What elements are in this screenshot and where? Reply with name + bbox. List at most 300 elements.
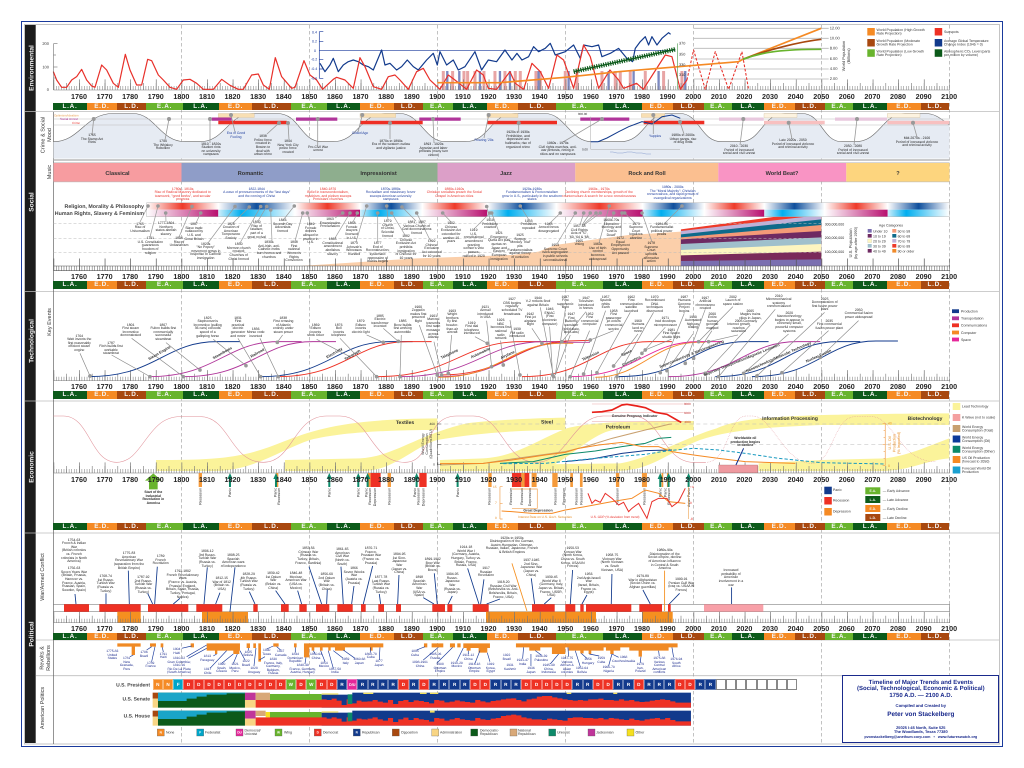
legend: age categories	[868, 224, 915, 253]
label: liberation theology: "God is	[606, 229, 617, 233]
label: repeal: 1933	[525, 218, 532, 222]
us population age bands	[300, 211, 821, 266]
year scale: 2080	[890, 382, 906, 391]
conflict: soviet disintegration: 1980s-90s	[657, 548, 673, 552]
event: jet: First jet	[525, 315, 536, 319]
president row: D	[637, 682, 640, 687]
revolt: chile: Chile	[204, 670, 211, 674]
label: violence 2020s: and criminal activity	[778, 145, 808, 149]
legend: technology: Computer	[961, 331, 977, 335]
president row: W	[309, 682, 313, 687]
year scale: 2020	[736, 92, 752, 101]
event: moon: 1969	[634, 318, 642, 322]
conflict: war of 1812	[213, 577, 231, 592]
marker captions	[198, 488, 691, 507]
label: exclusion 1882: Chinese	[400, 238, 412, 242]
revolt: korea egypt: 1919	[487, 662, 494, 666]
president row: D	[596, 682, 600, 687]
phase bar: L.D.	[124, 281, 139, 288]
year scale: 2010	[711, 382, 727, 391]
event: nanotechnology	[775, 312, 804, 333]
label: unrest 2010: 2010 - 2030	[730, 144, 748, 148]
conflict: vietnam: Vietnam, USA)	[601, 568, 623, 572]
year scale: 1820	[225, 92, 241, 101]
label: civil rights: cities and on campuses	[540, 152, 575, 156]
label: affirmative action: action	[647, 259, 656, 263]
legend: parties: Unionist	[557, 730, 570, 734]
legend: economic lines: Consumption (Total)	[962, 429, 993, 433]
label: emancipation	[320, 218, 340, 229]
caption: social gospel: Christian socialists preach the Social	[427, 190, 482, 194]
phase bar: E.A.	[430, 391, 445, 398]
label: birth control: control	[593, 249, 603, 253]
conflict: franco prussian: Prussian War	[361, 553, 381, 557]
social dots	[148, 206, 682, 213]
label: slave trade: Slave trade	[185, 226, 203, 230]
label: civil rights	[538, 141, 577, 156]
year scale: 2100	[941, 624, 957, 633]
year scale: 1960	[583, 624, 599, 633]
revolt: italy: Italy	[343, 660, 349, 664]
conflict: russo turkish 2: (Russia vs.	[135, 586, 152, 590]
event: nanotechnology: Nanotechnology	[777, 314, 802, 318]
event: passenger jet: commercial	[605, 323, 622, 327]
event: stephenson: 1825	[204, 316, 211, 320]
label: exclusion 1902: another 10	[443, 236, 459, 240]
world population gridlines and axis: 2.00	[830, 76, 838, 81]
conflict: wwi: Britain, France,	[454, 560, 478, 564]
legend: age categories: 50 to 59	[898, 229, 910, 233]
event: jet	[524, 312, 536, 327]
president row: D	[688, 682, 692, 687]
phase bar: L.D.	[529, 103, 544, 110]
president row: D	[218, 682, 221, 687]
label: womens vote: granting	[468, 243, 480, 247]
axis labels: 200	[42, 41, 50, 46]
crime line graph	[578, 112, 680, 154]
revolt: india 1857	[329, 668, 341, 674]
year scale: 1960	[583, 382, 599, 391]
revolt: gran colombia: Gran Colombia;	[167, 660, 191, 664]
event: genome	[678, 296, 691, 314]
revolt: korea egypt: Korea,	[486, 666, 496, 670]
marker captions: Panic	[658, 488, 662, 497]
phase bar: L.D.	[681, 281, 696, 288]
revolt: new granada	[120, 657, 134, 671]
sunspot and CO2 bars chart	[160, 28, 685, 90]
label: prohibition: enacted	[484, 225, 496, 229]
caption: last days: and the coming of Christ	[238, 194, 275, 198]
label: liberation theology: Liberation	[604, 222, 619, 226]
marker captions: Panic	[413, 488, 417, 497]
conflict: future war: American	[724, 575, 738, 579]
revolt: haiti	[160, 652, 167, 660]
revolt: ottoman 1916: 1916-18	[468, 662, 480, 666]
phase bar: E.A.	[572, 633, 587, 640]
label: quota act: Quota Act puts	[488, 238, 510, 242]
label: roaring twenties: Roaring '20s	[475, 138, 493, 142]
marker captions: Panic	[328, 488, 332, 497]
revolt: china 1911	[462, 654, 474, 661]
revolt: brazil 1920: 1922	[503, 653, 510, 657]
label: brown: unconstitutional	[544, 258, 567, 262]
conflict: russian revolution: Russian	[480, 570, 492, 574]
year scale: 1880	[378, 382, 394, 391]
world population gridlines and axis: 6.00	[830, 56, 838, 61]
label: jehovah: Witnesses	[346, 248, 362, 252]
year scale: 2060	[839, 92, 855, 101]
event: micromechanical: systems	[772, 301, 785, 305]
conflict: russo turkish 3: Turkey)	[202, 564, 213, 568]
legend: environmental: World Population (High Growth	[876, 28, 925, 32]
conflict: future war: probability of	[721, 572, 741, 576]
revolt: dominican	[288, 653, 303, 664]
label: urban gangs	[670, 133, 696, 144]
event: human genome: 2000	[709, 312, 716, 316]
event: marconi: message	[426, 328, 440, 332]
legend: economic lines: Forecast World Oil	[962, 466, 991, 470]
phase bar: E.A.	[710, 391, 725, 398]
curve names: Superconductivity & Nanoengineering	[659, 339, 725, 369]
interest rate and gdp lines	[500, 487, 689, 519]
conflict: civil war: (North vs.	[335, 558, 350, 562]
phase bar: E.D.	[228, 103, 243, 110]
marker captions: Depression	[373, 488, 377, 506]
conflict: sino japanese: China)	[394, 570, 404, 574]
label: urban gangs: of drug lords	[674, 140, 692, 144]
caption: fundamentalism: Fundamentalism & Pentecostalism	[506, 190, 558, 194]
year scale: 1830	[250, 624, 266, 633]
revolt: china indonesia	[542, 664, 556, 674]
year scale: 1870	[353, 92, 369, 101]
conflict: seven weeks: (Austria vs.	[346, 577, 362, 581]
label: new york police: New York City	[277, 143, 299, 147]
label: prohibition crime: organized crime	[506, 145, 530, 149]
label: new york police: police force	[279, 146, 297, 150]
year scale: 1920	[480, 475, 496, 484]
revolt: canada: 1837	[277, 649, 284, 653]
label: exclusion 1902: extended for	[442, 232, 460, 236]
phase bar: L.D.	[681, 633, 696, 640]
label: western outlaw: and vigilante justice	[376, 146, 406, 150]
event: television: Television	[579, 299, 593, 303]
legend: age categories: 40 to 49	[873, 249, 886, 253]
phase bar: L.D.	[529, 281, 544, 288]
phase bar: E.D.	[650, 391, 665, 398]
conflict: russian revolution: 1917	[482, 566, 490, 570]
conflict: russo turkish 1: (Russia vs.	[97, 585, 114, 589]
trend bars: optimism, unrest, crime	[54, 114, 949, 125]
year scale: 1870	[353, 272, 369, 281]
revolt: cuba 1895: 1895	[411, 649, 419, 653]
event: genome: Genome	[678, 302, 691, 306]
year scale: 2040	[788, 624, 804, 633]
president row: R	[392, 682, 395, 687]
revolt: iran poland: 1979	[637, 662, 644, 666]
event: fusion demo: Demonstration of	[812, 300, 838, 304]
row labels: U.S. Senate	[122, 697, 150, 703]
event: transistor: Bell Labs)	[564, 330, 579, 334]
event: chromosome: Artificial	[699, 299, 711, 303]
marker captions: Recession	[198, 488, 202, 505]
revolt: african asian colonies: Various	[562, 660, 572, 664]
label: fatalism: part of a	[250, 231, 263, 235]
conflict: american revolution	[114, 552, 144, 570]
event: locomotive: First steam	[122, 326, 139, 330]
label: repeal	[521, 220, 537, 230]
revolt: african asian colonies: African &	[560, 663, 574, 667]
phase bar: E.D.	[495, 523, 510, 530]
label: prohibition crime: depression are	[507, 137, 529, 141]
caption: fundamentalism	[502, 186, 562, 201]
year scale: 1760	[71, 382, 87, 391]
year scale: 1920	[480, 92, 496, 101]
revolt: texas: Texas	[262, 652, 271, 656]
conflict: opium 2	[318, 573, 335, 591]
phase bar: L.A.	[193, 103, 208, 110]
label: exclusion 1892: 1892	[428, 239, 435, 243]
conflict: french revolutionary wars: Britain, Spain, Russia,	[166, 587, 199, 591]
year scale: 1950	[557, 382, 573, 391]
label: female lawyers	[345, 222, 358, 240]
revolt: united states: 1775-83	[106, 649, 118, 653]
label: gilded age: Gilded Age	[352, 131, 368, 135]
event: cbs: 1927	[508, 297, 516, 301]
phase bar: L.A.	[336, 281, 351, 288]
event: nanotechnology: begins to appear in	[775, 318, 804, 322]
conflict: spanish american: of independence	[221, 564, 246, 568]
conflict: gulf war	[668, 578, 694, 593]
revolt: haiti 1804: 1804	[173, 647, 180, 651]
label: female doctors: allowed to	[303, 233, 318, 237]
year scale: 1930	[506, 272, 522, 281]
curve names	[148, 339, 833, 377]
label: reconstruction: Reconstruction;	[366, 248, 389, 252]
conflict: spanish american	[221, 554, 246, 569]
revolt: 1848 europe: 1848-49	[297, 663, 309, 667]
label: prohibition crime: 1920s to 1930s	[506, 130, 530, 134]
revolt: mexico peru: Mexico,	[229, 666, 241, 670]
legend: age categories: 80 to 89	[898, 244, 910, 248]
revolt: china 1850: 1850-64	[310, 652, 322, 656]
year scale: 1970	[608, 624, 624, 633]
label: civil rights acts	[569, 225, 589, 247]
event: atlantic steam: entirely under	[273, 326, 294, 330]
conflict: korea	[561, 547, 585, 569]
conflict: seven weeks: War	[351, 573, 357, 577]
conflict: spanish american war	[412, 576, 426, 598]
event: maglev: 2005	[747, 308, 754, 312]
year scale: 1970	[608, 272, 624, 281]
year scale: 1880	[378, 92, 394, 101]
label: quota act: Eastern	[493, 249, 505, 253]
label: female doctors: practice in	[303, 237, 318, 241]
conflict: spanish american war: 1898	[416, 575, 423, 579]
conflict: opium 1	[265, 572, 281, 590]
curve names: Nanotechnology/Molecular Technology	[746, 341, 812, 373]
year scale: 2060	[839, 272, 855, 281]
revolt: 1830 europe: Russia	[268, 671, 278, 675]
phase bar: E.D.	[650, 281, 665, 288]
chart labels: 40	[888, 422, 892, 426]
revolt: india 1857: 1857-58	[329, 666, 341, 670]
label: prohibition	[482, 219, 498, 230]
label: mormon: 1830	[235, 242, 242, 246]
conflict: boer: (British vs.	[425, 564, 441, 568]
event: morse: 1836	[252, 326, 259, 330]
address: The Woodlands, Texas 77380	[894, 729, 948, 734]
event: shuttle	[662, 328, 680, 339]
president row: D	[279, 682, 282, 687]
event: atlantic steam: steam power	[274, 330, 293, 334]
event: cbs: broadcasts	[504, 312, 520, 316]
event: wright: aircraft	[447, 330, 457, 334]
president row: D	[187, 682, 190, 687]
event: cbs: CBS begins	[503, 301, 521, 305]
conflict: sino japanese: Japanese	[392, 559, 407, 563]
label: exclusion 1902: years	[447, 239, 455, 243]
caption: revivalism: Revivalism and missionary fervor	[366, 190, 416, 194]
event: morse	[247, 328, 265, 338]
event: transistor: 1947	[568, 312, 575, 316]
label: unrest 2010	[723, 144, 756, 155]
label: prohibition crime: Prohibition, and	[506, 134, 530, 138]
year scale: 2040	[788, 92, 804, 101]
chart labels: 8000	[684, 402, 691, 406]
base frame with sidebar and guide lines: Rebellions	[46, 645, 52, 671]
event: sputnik: orbits	[602, 302, 610, 306]
ruler	[54, 264, 950, 271]
event: dna: Recombinant	[645, 298, 665, 302]
label: reconstruction: blacks begins	[367, 259, 388, 263]
event: fitch	[99, 342, 123, 356]
year scale: 1870	[353, 382, 369, 391]
year scale: 2050	[813, 475, 829, 484]
revolt: japan 1860s	[353, 658, 365, 665]
event: moon: Humans	[632, 322, 644, 326]
caption: revivalism: sweeps American university	[370, 194, 412, 198]
label: fundamentalist power: Fundamentalist	[650, 225, 673, 229]
revolt: india 1931: 1931-47	[517, 658, 529, 662]
phase bar: L.A.	[740, 633, 755, 640]
label: civil rights acts: 1965	[576, 239, 583, 243]
label: quota act: European	[492, 253, 506, 257]
chart labels: Steel	[541, 420, 554, 426]
event: maglev	[739, 310, 762, 324]
label: violence 2070s: Mid-2070s - 2100	[904, 136, 930, 140]
marker captions: Depression	[528, 488, 532, 506]
year scale: 2050	[813, 382, 829, 391]
conflict: afghanistan: (Soviet Union vs.	[630, 581, 656, 585]
year scale: 1840	[276, 382, 292, 391]
axis labels: 100	[42, 64, 50, 69]
phase bar: L.A.	[193, 633, 208, 640]
conflict: russo turkish 4	[240, 573, 258, 591]
conflict: american revolution: American	[122, 555, 136, 559]
phase bar: L.D.	[401, 633, 416, 640]
phase bar: E.D.	[369, 391, 385, 398]
conflict: russo japanese: Japan)	[447, 590, 457, 594]
conflict: russian civil war: Bolsheviks, Britain,	[489, 591, 518, 595]
axis labels: 350	[679, 52, 685, 56]
year scale: 1900	[429, 272, 445, 281]
year scale: 1810	[199, 272, 215, 281]
title block	[842, 675, 999, 743]
legend: environmental	[867, 28, 991, 57]
event: morse: Morse code	[247, 330, 265, 334]
phase bar: L.A.	[336, 523, 351, 530]
label: student riots: on university	[201, 149, 221, 153]
year scale: 2030	[762, 475, 778, 484]
event: chromosome: created	[700, 306, 711, 310]
president row: F	[177, 682, 180, 687]
phase bar: L.A.	[863, 281, 878, 288]
panel: music: ?	[896, 171, 900, 177]
label: northern slavery: states abolish	[156, 228, 176, 232]
event: zeppelin: flight	[415, 319, 422, 323]
year scale: 1770	[97, 475, 113, 484]
revolt: mexico 1854: 1854	[320, 660, 328, 664]
event: human genome: human	[707, 319, 717, 323]
revolt: japan 1877: Japan	[375, 662, 383, 666]
label: temperance: American	[224, 229, 238, 233]
event: generator: and motor	[230, 334, 246, 338]
president row: D	[402, 682, 405, 687]
event: generator	[230, 316, 246, 338]
revolt: cuba 1868: Cuba	[367, 655, 375, 659]
label: armed forces: 1948	[545, 222, 552, 226]
year scale: 1790	[148, 624, 164, 633]
event: airmail: 1921	[482, 304, 489, 308]
callout: oil decline: Worldwide oil	[734, 436, 756, 440]
phase bar: E.D.	[495, 103, 510, 110]
label: armed forces: Armed forces	[539, 225, 559, 229]
label: unrest 2010: social and civil unrest	[723, 151, 755, 155]
revolt: china indonesia: Indonesia	[542, 670, 556, 674]
label: boston police: created in	[256, 141, 270, 145]
legend: economic lines: Lead Technology	[962, 404, 989, 408]
marker captions: Panic	[664, 488, 668, 497]
year scale: 1940	[532, 475, 548, 484]
event: atlantic steam: of Atlantic	[276, 323, 291, 327]
label: birth control: widespread	[589, 257, 606, 261]
year scale	[66, 625, 962, 633]
world population gridlines and axis	[694, 26, 851, 81]
event: v2: V-2 rockets fired	[526, 299, 550, 303]
event leaders	[80, 307, 859, 377]
phase bar: L.D.	[264, 391, 279, 398]
phase bar: E.D.	[772, 391, 787, 398]
revolt: new granada: Peru	[123, 666, 130, 670]
revolt: cuba 1895	[411, 650, 419, 657]
conflict: american revolution: (separation from the	[114, 562, 144, 566]
phase bar: L.A.	[462, 103, 477, 110]
label: reconstruction: 1877	[374, 241, 381, 245]
event: micromechanical: 2010	[775, 294, 782, 298]
year scale: 1970	[608, 382, 624, 391]
president row: R	[514, 682, 518, 687]
label: quota act: Japan and	[491, 246, 507, 250]
event: space station	[723, 296, 743, 306]
marker captions: Recession	[642, 488, 646, 505]
phase bar: E.D.	[369, 523, 385, 530]
event: shuttle: 1981	[668, 328, 675, 332]
label: liberation theology: Dead"	[607, 233, 616, 237]
president row: R	[668, 682, 671, 687]
event: chromosome: chromosome	[695, 303, 715, 307]
year scale: 1800	[173, 92, 189, 101]
phase bar: E.D.	[896, 281, 911, 288]
